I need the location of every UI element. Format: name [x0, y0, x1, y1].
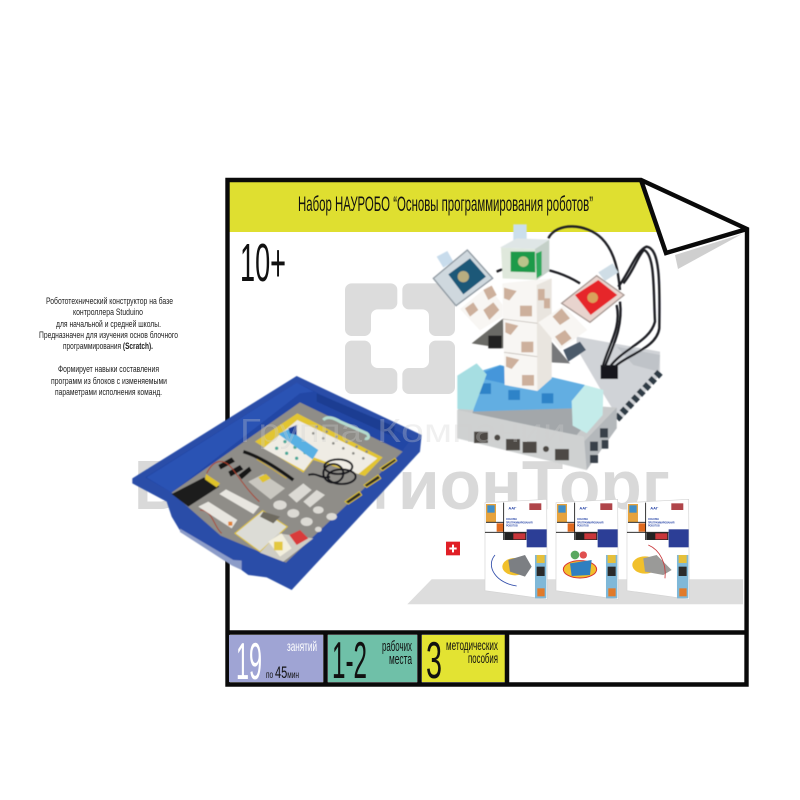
- controller connectors: [617, 372, 660, 419]
- foam insert: [172, 402, 403, 563]
- book 2: ААГ: [579, 506, 588, 511]
- stat: lessons: 19: [236, 633, 262, 691]
- sensor: red: [562, 263, 624, 322]
- teal handle: [323, 418, 368, 439]
- white plate: [263, 420, 377, 474]
- battery pad: [172, 477, 219, 507]
- watermark overlay text: Компании: [377, 412, 566, 449]
- book 1: [485, 499, 547, 599]
- column window marks: [504, 288, 550, 386]
- controller box: [577, 337, 660, 421]
- book 2: [556, 499, 618, 599]
- tray outer body: [132, 376, 422, 590]
- plus icon: [446, 542, 460, 555]
- tray rim highlight: [147, 383, 313, 493]
- book 3: [627, 499, 689, 599]
- photo: robot model: [433, 224, 660, 470]
- panel: yellow title band: [229, 182, 657, 232]
- wire coil: [308, 459, 356, 484]
- cards: [260, 533, 313, 562]
- book 1: РОБОТОВ: [506, 526, 518, 528]
- stat: manuals: [422, 632, 505, 690]
- tray inner walls: [145, 383, 412, 493]
- white pieces: [219, 489, 259, 514]
- stat: manuals: пособия: [468, 650, 498, 666]
- book 1: ААГ: [508, 506, 517, 511]
- red wire: [207, 462, 259, 502]
- base side holes: [590, 428, 608, 463]
- panel: main frame with folded corner: [227, 180, 747, 684]
- blue brick top: [473, 366, 552, 388]
- small white sockets: [273, 483, 337, 532]
- triangles: [472, 318, 503, 348]
- arm marks: [465, 286, 572, 346]
- stat: manuals: 3: [426, 632, 442, 690]
- photo: tray with kit parts: [132, 376, 422, 590]
- description text: Предназначен для изучения основ блочного: [39, 330, 178, 340]
- fold shadow: [675, 234, 742, 269]
- description text: программирования (Scratch).: [63, 341, 153, 351]
- book 2: РОБОТОВ: [577, 526, 589, 528]
- sensor: green: [500, 224, 549, 280]
- stat bar dividers: [326, 633, 507, 684]
- grey base: [457, 397, 617, 470]
- book 3: ОСНОВЫ: [648, 519, 660, 521]
- stat: lessons: занятий: [287, 638, 317, 654]
- control board: [235, 511, 287, 552]
- book 3: РОБОТОВ: [648, 526, 660, 528]
- watermark: company text: [134, 446, 670, 524]
- description text: Формирует навыки составления: [58, 364, 159, 374]
- left arm: [460, 286, 503, 330]
- stat: manuals: методических: [446, 637, 498, 653]
- plate pegs: [275, 440, 307, 460]
- description text: контроллера Studuino: [73, 307, 143, 317]
- age label 10+: 10+: [240, 233, 286, 293]
- book 2: ПРОГРАММИРОВАНИЯ: [577, 521, 604, 524]
- side yellow slots: [345, 458, 397, 504]
- description text: параметрами исполнения команд.: [55, 387, 162, 397]
- grey module: [248, 474, 285, 499]
- book 2: ОСНОВЫ: [577, 519, 589, 521]
- black strip: [243, 452, 293, 480]
- light cubes: [457, 363, 487, 410]
- description text: для начальной и средней школы.: [56, 319, 161, 329]
- blue bar: [278, 429, 318, 459]
- stat: work places: рабочих: [382, 638, 412, 655]
- stat: work places: места: [389, 651, 412, 668]
- watermark: logo: [345, 283, 455, 394]
- watermark: company text: олгаРег: [184, 446, 396, 524]
- book 3: ПРОГРАММИРОВАНИЯ: [648, 521, 675, 524]
- watermark overlay text: [240, 412, 566, 449]
- watermark: company text: ионТорг: [398, 446, 670, 524]
- description text: программ из блоков с изменяемыми: [51, 376, 167, 386]
- connector plug: [601, 365, 618, 379]
- right arm: [538, 306, 587, 349]
- stat: lessons: [229, 633, 323, 691]
- watermark: company text: В: [134, 446, 180, 524]
- description text: Робототехнический конструктор на базе: [46, 296, 173, 306]
- base inner: [473, 398, 600, 435]
- cables: [497, 226, 660, 367]
- description text: [39, 296, 178, 397]
- book 1: ПРОГРАММИРОВАНИЯ: [506, 521, 533, 524]
- yellow slot: [255, 413, 383, 476]
- book 3: ААГ: [650, 506, 659, 511]
- base side: [584, 408, 617, 470]
- watermark overlay text: Группа: [240, 412, 363, 449]
- white column: [502, 278, 552, 391]
- stat: work places: 1-2: [332, 632, 367, 690]
- stat: lessons: по 45мин: [266, 663, 299, 682]
- blue brick windows: [479, 383, 553, 403]
- sensor: blue: [433, 250, 493, 306]
- base holes: [474, 432, 569, 460]
- blue brick row: [473, 365, 585, 412]
- base front: [457, 410, 587, 470]
- tray label: [180, 529, 242, 570]
- grey floor under books: [407, 579, 743, 604]
- black keys: [218, 457, 252, 479]
- book 1: ОСНОВЫ: [506, 519, 518, 521]
